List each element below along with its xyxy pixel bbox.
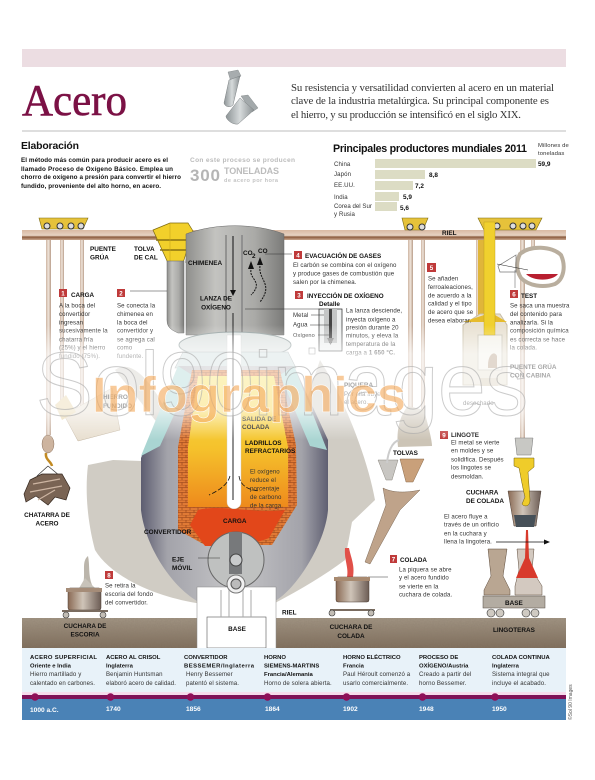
overhead rail (22, 230, 566, 240)
era 1948: horno Bessemer. (419, 680, 467, 687)
bar labels: Japón (334, 171, 351, 178)
era 1950: Inglaterra (492, 664, 520, 670)
step 3: inyección de oxígeno: inyecta oxígeno a (346, 316, 396, 324)
middle trolley (402, 218, 428, 230)
label: piquera (344, 382, 381, 406)
step 8: escoria: del convertidor. (105, 600, 148, 606)
step 2: Se conecta la (117, 302, 156, 310)
label: tolvas: TOLVAS (393, 450, 419, 457)
era 1740: Inglaterra (106, 664, 134, 670)
label: desechado: desechado (463, 400, 494, 407)
crane trolleys (39, 218, 542, 230)
label: salida de colada (242, 416, 277, 431)
chimney (186, 226, 284, 335)
label: eje móvil (172, 556, 192, 572)
step 5: ferroaleaciones (427, 263, 474, 324)
bar values: 5,9 (403, 194, 412, 201)
step 9: lingote: 9 (442, 432, 446, 440)
era 1000 a.C.: calentado en carbones. (30, 680, 95, 687)
era 1950: incluye el acabado. (492, 680, 546, 687)
era 1902: Francia (343, 664, 365, 670)
label: riel bottom: RIEL (282, 610, 297, 616)
step 3: inyección de oxígeno: Agua (293, 322, 308, 328)
refractory bricks (178, 370, 297, 545)
label: tolva de cal: DE CAL (134, 254, 158, 262)
label: ladrillos refractarios: LADRILLOS (245, 440, 282, 447)
label: chatarra de acero: CHATARRA DE (24, 512, 71, 519)
test ladle (497, 248, 564, 288)
label: base right: BASE (505, 600, 523, 607)
step 5: ferroaleaciones: de acuerdo a la (428, 292, 472, 300)
step 2 (117, 289, 156, 360)
era 1000 a.C.: 1000 a.C. (30, 707, 59, 714)
step 5: ferroaleaciones: ferroaleaciones, (428, 284, 473, 291)
label: tolva de cal: TOLVA (134, 246, 155, 253)
era 1000 a.C.: Hierro martillado y (30, 671, 82, 678)
label: puente grúa (90, 246, 117, 262)
step 4: evacuación de gases: y produce gases de combustión que (293, 270, 395, 278)
era 1000 a.C. (30, 655, 97, 714)
era 1864 (264, 655, 332, 713)
scrap load (24, 435, 70, 505)
label: chatarra de acero: ACERO (35, 520, 59, 528)
era 1856: Henry Bessemer (186, 671, 233, 678)
step 6: test: TEST (521, 293, 537, 300)
label: cuchara de escoria: ESCORIA (70, 632, 100, 638)
step 6: test (510, 290, 570, 352)
step 4: evacuación de gases: EVACUACIÓN DE GASES (305, 251, 381, 260)
text block: oxygen reaction (250, 468, 283, 510)
step 7: colada: 7 (392, 556, 396, 564)
step 7: colada: y el acero fundido (399, 574, 449, 582)
era 1856 (184, 655, 255, 713)
step 1: carga: chatarra fría (59, 336, 94, 344)
step 3: inyección de oxígeno: INYECCIÓN DE OXÍGENO (307, 291, 384, 300)
step 9: lingote (440, 431, 504, 480)
label: lanza de oxígeno: LANZA DE (200, 296, 233, 302)
era 1856: 1856 (186, 706, 201, 713)
label: lingoteras: LINGOTERAS (493, 627, 536, 634)
era 1948: PROCESO DE (419, 655, 458, 661)
era 1864: Francia/Alemania (264, 672, 314, 678)
step 8: escoria: Se retira la (105, 582, 136, 590)
label: puente grúa con cabina: PUENTE GRÚA (510, 362, 557, 371)
step 4: evacuación de gases (293, 251, 397, 286)
step 8: escoria (105, 571, 154, 606)
era 1856: CONVERTIDOR (184, 655, 228, 661)
label: piquera: PIQUERA (344, 382, 374, 389)
era 1950: COLADA CONTINUA (492, 655, 550, 661)
step 5: ferroaleaciones: 5 (430, 265, 434, 272)
label: cuchara de colada bottom: CUCHARA DE (330, 624, 373, 631)
step 1: carga: convertidor (59, 311, 90, 318)
text block: oxygen reaction: El oxígeno (250, 468, 280, 476)
era 1902: 1902 (343, 706, 358, 713)
chimney hopper: tolva de cal (153, 223, 193, 263)
step 9: lingote: desmoldan. (451, 474, 484, 480)
era 1948 (419, 655, 471, 713)
callout: 300 toneladas: TONELADAS (224, 166, 279, 176)
step 1: carga: sucesivamente la (59, 328, 108, 334)
label: CO2 and CO: CO (258, 248, 268, 255)
step 7: colada: COLADA (400, 557, 427, 564)
step 1: carga: CARGA (71, 292, 95, 299)
era 1948: Creado a partir del (419, 671, 471, 678)
timeline (22, 648, 566, 720)
label: chimenea: CHIMENEA (188, 260, 222, 267)
molten charge interior (188, 376, 288, 507)
era 1948: OXÍGENO/Austria (419, 662, 469, 670)
intro text: clave de la industria metalúrgica. Su principal componente es (291, 95, 549, 107)
credit: ©Sol 90 Images (567, 684, 574, 720)
step 3: inyección de oxígeno: presión durante 20 (346, 324, 399, 332)
label: chatarra de acero (24, 512, 71, 528)
step 9: lingote: los lingotes se (451, 464, 492, 472)
label: convertidor: CONVERTIDOR (144, 529, 192, 536)
chart unit: Millones de (538, 143, 570, 149)
label: ladrillos refractarios: REFRACTARIOS (245, 448, 296, 455)
step 9: lingote: solidifica. Después (451, 456, 504, 464)
label: hierro fundido: FUNDIDO (103, 403, 132, 410)
pouring ladle: cuchara de colada (329, 548, 375, 616)
label: hierro fundido: HIERRO (103, 394, 128, 401)
label: cuchara de colada bottom: COLADA (337, 633, 365, 640)
label: piquera: el acero. (344, 399, 368, 406)
text block: oxygen reaction: porcentaje (250, 486, 280, 492)
label: riel top: RIEL (442, 230, 457, 237)
era 1950 (492, 655, 550, 713)
step 1: carga: 1 (61, 290, 65, 298)
bars (375, 159, 536, 211)
label: base centre: BASE (228, 626, 247, 633)
leader lines (130, 254, 388, 577)
step 1: carga: A la boca del (59, 302, 95, 310)
step 3: inyección de oxígeno: Oxígeno (293, 333, 315, 339)
label: puente grúa: PUENTE (90, 246, 117, 253)
era 1864: Horno de solera abierta. (264, 680, 332, 687)
step 3: inyección de oxígeno: minutos, y eleva la (346, 332, 399, 340)
text block: steel flow: El acero fluye a (444, 514, 488, 520)
heading: Elaboración: Elaboración (21, 141, 79, 152)
step 8: escoria: escoria del fondo (105, 591, 154, 598)
callout: 300 toneladas: Con este proceso se producen (190, 157, 295, 164)
text block: method: chorro de oxígeno a presión para convertir el hierro (21, 174, 181, 181)
step 3: inyección de oxígeno: La lanza desciende, (346, 308, 402, 314)
callout: 300 toneladas: de acero por hora (224, 178, 279, 184)
crane ropes (46, 240, 535, 440)
label: hierro fundido (103, 394, 132, 410)
era 1902: HORNO ELÉCTRICO (343, 653, 401, 661)
step 6: test: del contenido para (510, 311, 562, 318)
label: piquera: Por ella fluye (344, 391, 381, 398)
intro text: Su resistencia y versatilidad convierten al acero en un material (291, 82, 554, 94)
step 2: 2 (119, 290, 123, 298)
step 1: carga (59, 289, 108, 360)
step 7: colada: La piquera se abre (399, 566, 452, 574)
callout: 300 toneladas (190, 157, 295, 185)
era 1740: ACERO AL CRISOL (106, 655, 161, 661)
step 2: chimenea en (117, 311, 153, 318)
text block: method: fundido, proveniente del alto horno, en acero. (21, 183, 161, 190)
label: carga: CARGA (223, 518, 247, 525)
era 1000 a.C.: ACERO SUPERFICIAL (30, 655, 97, 661)
step 3: inyección de oxígeno: 3 (297, 292, 301, 300)
era 1740: elaboró acero de calidad. (106, 680, 176, 687)
bar values: 7,2 (415, 183, 424, 190)
step 3: inyección de oxígeno: Metal (293, 312, 308, 319)
text block: steel flow: en la cuchara y (444, 530, 488, 538)
label: eje móvil: EJE (172, 556, 185, 564)
era 1902: usarlo comercialmente. (343, 680, 408, 687)
chart unit (538, 143, 570, 157)
bar labels (334, 161, 372, 218)
teal neck (141, 366, 327, 456)
text block: steel flow: llena la lingotera. (444, 538, 492, 546)
oxygen lance (209, 235, 260, 509)
label: lanza de oxígeno: OXÍGENO (201, 302, 231, 312)
step 6: test: Se saca una muestra (510, 302, 570, 310)
base (197, 575, 276, 650)
era 1864: SIEMENS-MARTINS (264, 664, 319, 670)
era 1864: HORNO (264, 655, 286, 661)
bar values: 8,8 (429, 172, 438, 179)
step 2: como (117, 344, 133, 352)
bar labels: India (334, 194, 348, 201)
step 2: convertidor y (117, 328, 154, 334)
era 1950: 1950 (492, 706, 507, 713)
text block: oxygen reaction: de la carga. (250, 502, 283, 510)
step 9: lingote: en moldes y se (451, 448, 494, 454)
era 1000 a.C.: Oriente e India (30, 664, 72, 670)
step 2: la boca del (117, 320, 148, 326)
label: cuchara de escoria (64, 623, 107, 638)
text block: steel flow: través de un orificio (444, 522, 499, 528)
label: CO2 and CO: CO (243, 250, 253, 257)
text block: method (21, 157, 181, 190)
step 5: ferroaleaciones: desea elaborar. (428, 318, 472, 324)
watermark: Infographics (92, 367, 406, 423)
step 1: carga: ingresan (59, 320, 83, 326)
bar labels: Corea del Sur (334, 203, 372, 210)
label: lanza de oxígeno (200, 296, 233, 312)
label: salida de colada: SALIDA DE (242, 416, 277, 423)
step 3: inyección de oxígeno: temperatura de la (346, 341, 396, 348)
step 1: carga: fundido (75%). (59, 353, 100, 360)
text block: steel flow (444, 514, 499, 546)
era 1740: Benjamin Huntsman (106, 671, 163, 678)
step 3: inyección de oxígeno (293, 291, 402, 356)
step 3: inyección de oxígeno: Detalle (319, 301, 340, 308)
bar values: 59,9 (538, 161, 551, 168)
title: Acero (22, 76, 127, 125)
converter shell (141, 366, 328, 601)
label: cuchara de colada bottom (330, 624, 373, 640)
iron ladle: hierro fundido (55, 388, 120, 441)
outer cradle (87, 360, 375, 603)
era 1740 (106, 655, 176, 713)
ground (22, 618, 566, 648)
era 1856: patentó el sistema. (186, 680, 239, 687)
step 6: test: 6 (512, 292, 516, 298)
watermark: Sol90images (36, 335, 528, 435)
label: puente grúa con cabina: CON CABINA (510, 372, 551, 380)
bar chart: main producers (333, 143, 570, 218)
step 2: fundente. (117, 353, 144, 360)
trunnion wheel (208, 532, 264, 588)
label: ladrillos refractarios (245, 440, 296, 455)
intro text (291, 82, 554, 121)
text block: method: llamado Proceso de Oxígeno Básico. Emplea un (21, 166, 173, 173)
carga: molten steel (190, 508, 285, 546)
label: eje móvil: MÓVIL (172, 563, 192, 572)
era 1864: 1864 (265, 706, 280, 713)
step 6: test: analizarla. Si la (510, 320, 554, 326)
left trolley (39, 218, 88, 229)
step 5: ferroaleaciones: calidad y el tipo (428, 300, 472, 308)
step 7: colada: cuchara de colada. (399, 592, 453, 598)
bar labels: EE.UU. (334, 182, 355, 189)
step 4: evacuación de gases: 4 (296, 252, 300, 260)
era 1948: 1948 (419, 706, 434, 713)
label: CO2 and CO: 2 (252, 253, 256, 260)
text block: oxygen reaction: reduce el (250, 477, 276, 484)
era 1856: BESSEMER/Inglaterra (184, 664, 255, 670)
step 7: colada: se vierte en la (399, 584, 439, 590)
callout: 300 toneladas: 300 (190, 166, 220, 185)
right trolley (478, 218, 542, 230)
step 8: escoria: 8 (107, 572, 111, 580)
watermark haze (0, 325, 595, 440)
chart unit: toneladas (538, 151, 564, 157)
step 6: test: la colada. (510, 344, 537, 352)
bar labels: China (334, 161, 351, 168)
arrow: ingot flow (496, 540, 550, 544)
era 1902: Paul Héroult comenzó a (343, 671, 411, 678)
chimney pipe (167, 261, 184, 333)
step 5: ferroaleaciones: de acero que se (428, 309, 474, 316)
chart title: Principales productores mundiales 2011 (333, 143, 527, 155)
bar labels: y Rusia (334, 211, 356, 218)
step 6: test: composición química (510, 328, 569, 334)
step 9: lingote: LINGOTE (451, 432, 479, 439)
header band (22, 49, 566, 67)
detail: lance cross section (309, 309, 342, 354)
label: puente grúa: GRÚA (90, 252, 109, 262)
crane with cabin (463, 222, 507, 386)
icon: steel bolts (224, 70, 258, 124)
step 7: colada (390, 555, 453, 598)
slag ladle (62, 556, 108, 618)
converter collar (175, 332, 296, 368)
bar values: 5,6 (400, 205, 409, 212)
step 3: inyección de oxígeno: carga a 1 650 °C. (346, 350, 395, 356)
step 6: test: es correcta se hace (510, 336, 566, 344)
era 1902 (343, 653, 411, 713)
step 2: se agrega cal (117, 336, 155, 344)
label: CO2 and CO (243, 248, 268, 260)
label: puente grúa con cabina (510, 362, 557, 380)
timeline markers (31, 693, 499, 701)
text block: method: El método más común para producir acero es el (21, 157, 168, 164)
bar values (400, 161, 551, 212)
label: cuchara de colada right: DE COLADA (466, 498, 504, 505)
label: cuchara de colada right: CUCHARA (466, 490, 499, 496)
label: cuchara de escoria: CUCHARA DE (64, 623, 107, 630)
intro text: el hierro, y su producción se intensificó en el siglo XIX. (291, 109, 521, 121)
step 9: lingote: El metal se vierte (451, 440, 500, 446)
step 1: carga: (25%) y el hierro (59, 344, 106, 352)
step 4: evacuación de gases: El carbón se combina con el oxígeno (293, 262, 397, 269)
gas arrows (248, 257, 266, 302)
label: tolva de cal (134, 246, 158, 262)
era 1950: Sistema integral que (492, 671, 550, 678)
label: salida de colada: COLADA (242, 424, 270, 431)
label: cuchara de colada right (466, 490, 504, 505)
text block: oxygen reaction: de carbono (250, 494, 282, 501)
step 5: ferroaleaciones: Se añaden (428, 276, 458, 282)
step 4: evacuación de gases: salen por la chimenea. (293, 279, 357, 286)
hoppers: tolvas (365, 406, 432, 564)
era 1740: 1740 (106, 706, 121, 713)
molds: lingoteras (483, 530, 545, 617)
casting ladle and yellow hook (508, 438, 541, 527)
